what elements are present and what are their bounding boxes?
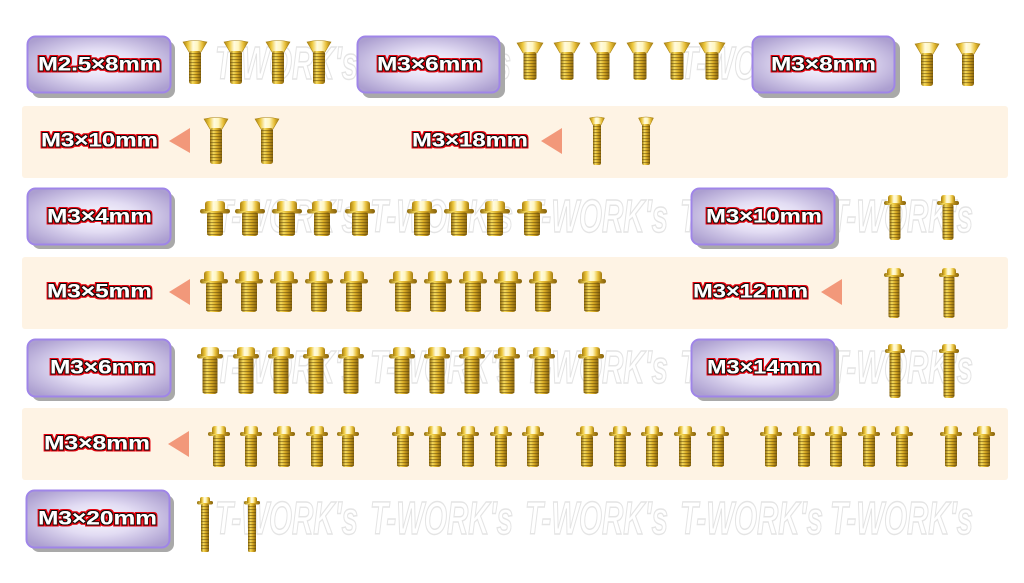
badge: M2.5×8mm — [28, 36, 175, 98]
badge: M3×6mm top: M3×6mm — [377, 54, 482, 76]
watermarks: T-WORK's — [215, 190, 358, 242]
screws: M3×5mm — [200, 271, 606, 312]
panel: row 2 band — [22, 106, 1008, 178]
label and arrow: M3×12mm: M3×12mm — [693, 282, 808, 302]
screws: M3×18mm flat — [590, 117, 654, 165]
watermarks: T-WORK's — [370, 492, 513, 544]
screws: M3×14mm — [885, 344, 959, 398]
badge: M3×14mm: M3×14mm — [707, 358, 821, 378]
watermarks: T-WORK's — [215, 341, 358, 393]
watermarks: T-WORK's — [680, 341, 823, 393]
watermarks: T-WORK's — [525, 341, 668, 393]
watermarks: T-WORK's — [215, 37, 358, 89]
screws: M3×20mm — [197, 497, 260, 552]
watermarks: T-WORK's — [525, 492, 668, 544]
label and arrow: M3×18mm: M3×18mm — [412, 130, 528, 152]
screws: M3×10mm flat — [204, 118, 279, 164]
watermarks: T-WORK's — [525, 190, 668, 242]
label and arrow: M3×5mm: M3×5mm — [47, 282, 152, 302]
badge: M3×10mm: M3×10mm — [706, 206, 822, 228]
label and arrow: M3×5mm — [47, 279, 190, 305]
watermarks: T-WORK's — [368, 37, 511, 89]
badge: M3×20mm — [26, 490, 174, 552]
watermarks — [215, 37, 973, 544]
label and arrow: M3×18mm — [412, 128, 562, 154]
badge: M3×4mm: M3×4mm — [47, 206, 152, 228]
screws: M3×12mm — [884, 268, 959, 318]
badge: M3×8mm top: M3×8mm — [771, 54, 876, 76]
label and arrow: M3×8mm: M3×8mm — [44, 434, 150, 454]
badge: M3×20mm: M3×20mm — [38, 508, 157, 530]
screws: M2.5×8mm — [183, 40, 331, 84]
watermarks: T-WORK's — [680, 492, 823, 544]
badge: M3×6mm — [28, 340, 175, 401]
watermarks: T-WORK's — [680, 190, 823, 242]
screws: M3×8mm button — [208, 426, 995, 467]
watermarks: T-WORK's — [370, 190, 513, 242]
badge: M3×4mm — [28, 188, 175, 249]
watermarks: T-WORK's — [680, 37, 823, 89]
panel: row 6 band — [22, 408, 1008, 480]
watermarks: T-WORK's — [370, 341, 513, 393]
screws: M3×10mm — [884, 195, 959, 240]
label and arrow: M3×10mm: M3×10mm — [41, 130, 158, 152]
screws: M3×6mm flat — [517, 42, 725, 80]
screws: M3×4mm — [200, 201, 547, 236]
screws: M3×6mm button — [197, 347, 604, 394]
label and arrow: M3×10mm — [41, 128, 190, 153]
panel: row 4 band — [22, 257, 1008, 329]
badge: M3×6mm: M3×6mm — [50, 358, 155, 378]
badge: M3×6mm top — [358, 36, 505, 98]
label and arrow: M3×8mm — [44, 431, 189, 457]
badge: M2.5×8mm: M2.5×8mm — [38, 54, 161, 76]
badge: M3×8mm top — [752, 36, 900, 98]
badge: M3×10mm — [692, 188, 839, 249]
label and arrow: M3×12mm — [693, 279, 842, 305]
watermarks: T-WORK's — [215, 492, 358, 544]
badge: M3×14mm — [692, 340, 839, 401]
screws: M3×8mm flat — [915, 42, 980, 86]
